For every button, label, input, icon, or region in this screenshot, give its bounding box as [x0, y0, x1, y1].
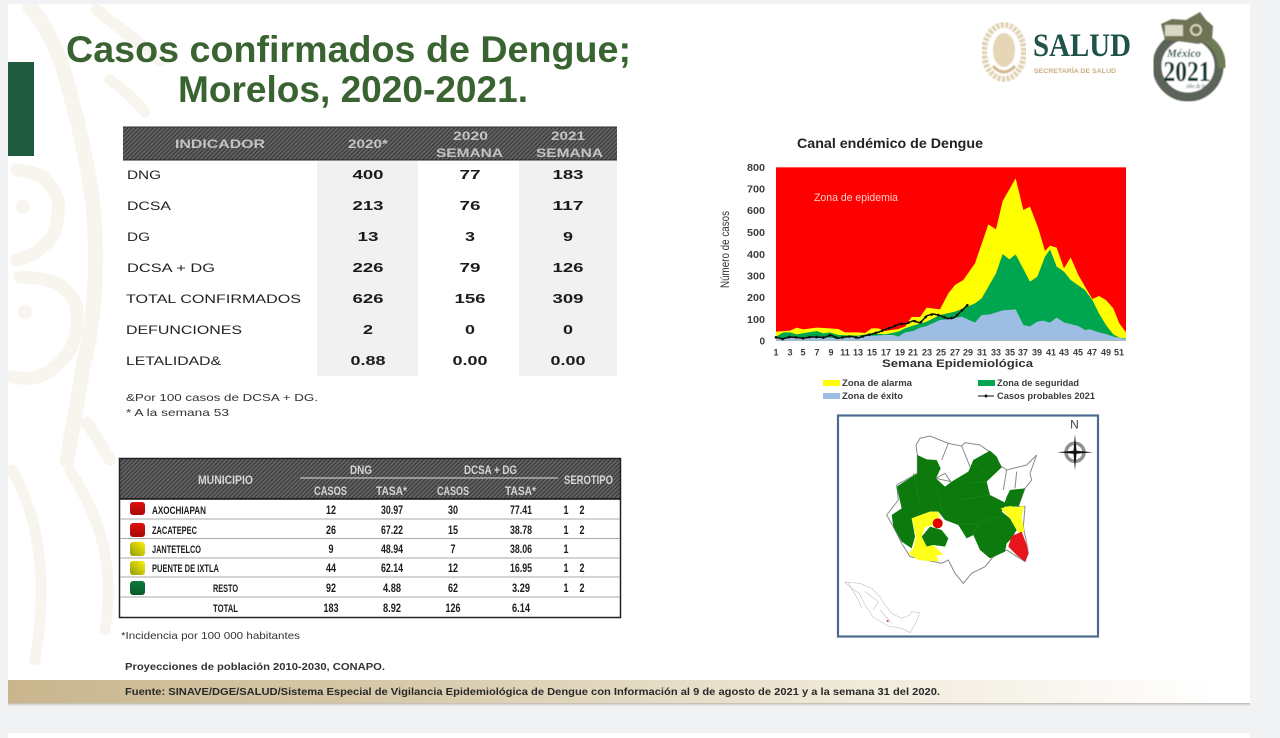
table header: CASOS	[314, 484, 347, 498]
row labels: DG	[127, 232, 150, 244]
chart: canal endémico	[718, 136, 1126, 401]
x axis labels: 17	[881, 348, 891, 358]
column 2021 semana values: 309	[552, 292, 584, 306]
row Puente de Ixtla: 2	[580, 563, 584, 575]
north label: N	[1070, 417, 1079, 431]
table footnotes	[126, 392, 318, 419]
row Resto: 2	[580, 583, 584, 595]
row Jantetelco	[130, 542, 569, 556]
row labels	[126, 170, 301, 368]
legend	[823, 378, 1095, 401]
column 2021 semana values	[550, 168, 586, 368]
lower slide strip	[8, 733, 1250, 738]
x axis labels: 47	[1087, 348, 1097, 358]
x axis labels: 39	[1032, 348, 1042, 358]
row labels: TOTAL CONFIRMADOS	[126, 294, 301, 306]
note: incidencia: *Incidencia por 100 000 habitantes	[121, 630, 300, 642]
x axis labels: 37	[1018, 348, 1028, 358]
text México: México	[1166, 46, 1201, 60]
legend: Zona de seguridad	[997, 378, 1079, 388]
x axis labels: 27	[950, 348, 960, 358]
green north-east municipality	[1003, 488, 1025, 507]
column 2021 semana values: 126	[552, 261, 584, 275]
x axis labels: 13	[853, 348, 863, 358]
row Jantetelco: 48.94	[381, 544, 403, 556]
row Resto: 4.88	[383, 583, 401, 595]
row labels: DEFUNCIONES	[126, 325, 242, 337]
row Resto: 1	[564, 583, 569, 595]
column 2021 semana values: 9	[563, 230, 573, 244]
row Axochiapan: 1	[564, 505, 569, 517]
x axis labels: 7	[814, 348, 820, 358]
x axis labels: 3	[787, 348, 793, 358]
row Puente de Ixtla	[130, 561, 584, 575]
y axis labels: 700	[747, 184, 765, 196]
row Total: 183	[324, 603, 338, 615]
green municipalities	[892, 451, 1017, 558]
map frame	[838, 416, 1098, 636]
legend: Zona de alarma	[842, 378, 913, 388]
x axis labels: 29	[963, 348, 973, 358]
row Resto: RESTO	[213, 583, 238, 595]
table header: SEMANA	[536, 146, 603, 160]
column 2020 values	[350, 168, 386, 368]
x axis labels: 9	[828, 348, 834, 358]
green central municipality	[922, 527, 948, 547]
x axis labels: 51	[1114, 348, 1124, 358]
table header: 2020	[453, 129, 488, 143]
safety zone	[776, 249, 1126, 341]
x axis labels: 1	[773, 348, 779, 358]
text Año de la Independencia: Año de la	[1185, 83, 1206, 90]
title: Morelos, 2020-2021.	[178, 69, 528, 110]
row Zacatepec: 1	[564, 525, 569, 537]
column 2021 semana values: 183	[552, 168, 584, 182]
table header: INDICADOR	[175, 137, 265, 151]
x axis labels: 23	[922, 348, 932, 358]
column 2020 semana values: 76	[460, 199, 481, 213]
row Axochiapan: 2	[580, 505, 584, 517]
row Total	[213, 603, 530, 615]
icon: compass	[1057, 417, 1093, 470]
text 2021: 2021	[1164, 56, 1210, 88]
chart title: Canal endémico de Dengue	[797, 136, 984, 151]
y axis labels: 500	[747, 228, 765, 239]
map panel	[838, 416, 1098, 636]
y axis labels	[747, 163, 765, 348]
legend: Casos probables 2021	[997, 391, 1095, 401]
state outline	[887, 436, 1037, 583]
source bar	[8, 680, 1250, 706]
logo: México 2021	[1157, 12, 1222, 97]
row Puente de Ixtla: 16.95	[510, 563, 532, 575]
x axis labels: 33	[991, 348, 1001, 358]
table header: 2020*	[348, 137, 388, 151]
y axis title: Número de casos	[718, 211, 732, 288]
table header: TASA*	[376, 484, 407, 498]
x axis labels: 35	[1005, 348, 1015, 358]
row Zacatepec: 38.78	[510, 525, 532, 537]
row Jantetelco: JANTETELCO	[152, 544, 201, 556]
row Zacatepec: ZACATEPEC	[152, 525, 197, 537]
row Resto: 3.29	[512, 583, 530, 595]
row Axochiapan: 12	[326, 505, 336, 517]
row Zacatepec: 15	[448, 525, 458, 537]
serpent head	[1161, 12, 1213, 44]
row Total: 8.92	[383, 603, 401, 615]
row labels: DCSA	[127, 201, 171, 213]
y axis labels: 300	[747, 272, 765, 282]
x axis labels: 49	[1101, 348, 1111, 358]
plot area	[776, 167, 1126, 341]
row Axochiapan: 30.97	[381, 505, 403, 517]
row Jantetelco: 7	[450, 544, 456, 556]
y axis labels: 400	[747, 250, 765, 261]
x axis labels: 21	[908, 348, 918, 358]
column 2020 semana values: 3	[465, 230, 475, 244]
row Zacatepec: 67.22	[381, 525, 403, 537]
column 2020 values: 213	[352, 199, 384, 213]
x axis labels	[773, 348, 1124, 358]
x axis title: Semana Epidemiológica	[882, 358, 1034, 370]
background watermark pattern	[12, 7, 160, 660]
row labels: DNG	[127, 170, 161, 182]
wordmark Secretaría de Salud: SECRETARÍA DE SALUD	[1034, 66, 1116, 75]
note: proyecciones: Proyecciones de población 2010-2030, CONAPO.	[125, 661, 385, 673]
x axis labels: 11	[840, 348, 850, 358]
y axis labels: 600	[747, 206, 765, 217]
column 2020 semana values	[452, 168, 488, 368]
row Puente de Ixtla: 62.14	[381, 563, 403, 575]
row labels: DCSA + DG	[127, 263, 215, 275]
title: Casos confirmados de Dengue;	[66, 29, 631, 70]
row Jantetelco: 38.06	[510, 544, 532, 556]
red Axochiapan	[1008, 532, 1028, 562]
column 2020 values: 2	[363, 323, 373, 337]
row labels: LETALIDAD&	[126, 356, 221, 368]
alarm zone	[776, 178, 1126, 341]
row Jantetelco: 9	[328, 544, 334, 556]
row Resto	[130, 581, 584, 595]
table body frame	[120, 458, 620, 618]
x axis labels: 43	[1059, 348, 1069, 358]
row Axochiapan	[130, 502, 584, 517]
table header: 2021	[551, 129, 585, 143]
column 2020 values: 626	[352, 292, 384, 306]
shaded columns	[317, 161, 617, 376]
column 2020 values: 0.88	[350, 354, 386, 368]
internal municipal lines north	[936, 443, 1017, 490]
source bar: Fuente: SINAVE/DGE/SALUD/Sistema Especial de Vigilancia Epidemiológica de Dengue con Información al 9 de agosto de 2021 y a la semana 31 del 2020.	[125, 686, 940, 698]
x axis labels: 45	[1073, 348, 1083, 358]
row Puente de Ixtla: 12	[448, 563, 458, 575]
column 2021 semana values: 0	[563, 323, 573, 337]
column 2020 semana values: 79	[460, 261, 481, 275]
table header: DNG	[350, 463, 372, 477]
epidemic zone	[776, 167, 1126, 341]
column 2020 semana values: 77	[460, 168, 481, 182]
row Resto: 92	[326, 583, 336, 595]
yellow Puente de Ixtla	[908, 512, 943, 562]
probable cases 2021 line	[776, 304, 968, 339]
column 2020 values: 226	[352, 261, 384, 275]
green side tab	[8, 62, 34, 156]
table footnotes: &Por 100 casos de DCSA + DG.	[126, 392, 318, 404]
table header: CASOS	[437, 484, 469, 498]
column 2021 semana values: 0.00	[550, 354, 586, 368]
y axis labels: 0	[759, 336, 765, 348]
x axis labels: 5	[800, 348, 806, 358]
y axis labels: 800	[747, 163, 765, 174]
x axis labels: 31	[977, 348, 987, 358]
column 2021 semana values: 117	[552, 199, 584, 213]
table header: TASA*	[505, 484, 536, 498]
table header	[123, 127, 617, 160]
row Axochiapan: 30	[448, 505, 458, 517]
serpent ring	[1157, 35, 1219, 97]
table header: DCSA + DG	[464, 463, 517, 477]
row Axochiapan: AXOCHIAPAN	[152, 505, 206, 517]
row Axochiapan: 77.41	[510, 505, 532, 517]
municipal boundaries	[913, 463, 1000, 535]
column 2020 semana values: 0	[465, 323, 475, 337]
x axis labels: 19	[895, 348, 905, 358]
column 2020 values: 400	[352, 168, 384, 182]
zone label: Zona de epidemia	[814, 192, 899, 204]
row Puente de Ixtla: 44	[326, 563, 336, 575]
success zone	[776, 309, 1126, 341]
column 2020 semana values: 156	[454, 292, 486, 306]
title	[66, 29, 631, 110]
row Total: 126	[446, 603, 460, 615]
x axis labels: 41	[1046, 348, 1056, 358]
row Zacatepec	[130, 523, 584, 537]
row Zacatepec: 26	[326, 525, 336, 537]
table footnotes: * A la semana 53	[126, 407, 229, 419]
row Puente de Ixtla: 1	[564, 563, 569, 575]
icon: national seal	[984, 25, 1024, 79]
y axis labels: 100	[747, 315, 765, 326]
row Resto: 62	[448, 583, 458, 595]
yellow Jantetelco	[1001, 505, 1024, 533]
logo: Secretaría de Salud	[984, 25, 1131, 79]
table: indicadores	[123, 127, 617, 376]
row Puente de Ixtla: PUENTE DE IXTLA	[152, 563, 219, 575]
column 2020 values: 13	[358, 230, 379, 244]
row Total: 6.14	[512, 603, 530, 615]
y axis labels: 200	[747, 293, 765, 304]
table: municipios	[120, 458, 620, 618]
wordmark SALUD: SALUD	[1033, 28, 1131, 64]
row Jantetelco: 1	[564, 544, 569, 556]
table header: SEROTIPO	[564, 473, 613, 487]
red Zacatepec	[933, 518, 943, 528]
x axis labels: 15	[867, 348, 877, 358]
table header: SEMANA	[436, 146, 503, 160]
table header: MUNICIPIO	[198, 473, 253, 487]
x axis labels: 25	[936, 348, 946, 358]
table header	[120, 458, 620, 499]
row Total: TOTAL	[213, 603, 238, 615]
column 2020 semana values: 0.00	[452, 354, 488, 368]
inset map of Mexico	[845, 582, 919, 633]
legend: Zona de éxito	[842, 391, 904, 401]
row Zacatepec: 2	[580, 525, 584, 537]
